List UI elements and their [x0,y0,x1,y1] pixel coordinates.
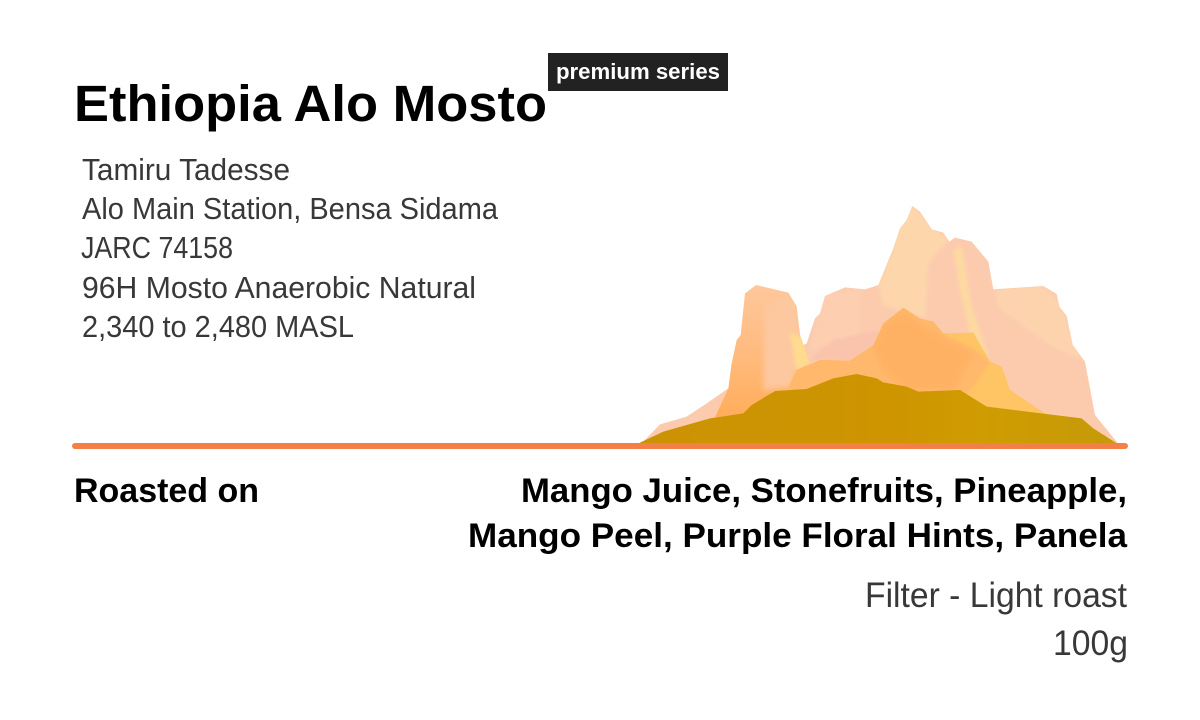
title: Ethiopia Alo Mosto [74,75,547,132]
tasting notes: Mango Peel, Purple Floral Hints, Panela [468,517,1128,555]
roast and weight: Filter - Light roast [865,576,1127,615]
mountain: front olive hill [635,374,1119,445]
coffee details text block [81,152,499,344]
coffee details text block: Alo Main Station, Bensa Sidama [82,191,499,226]
roast and weight: 100g [1053,624,1128,663]
coffee details text block: JARC 74158 [81,230,233,265]
tasting notes [468,472,1128,555]
illustration: layered mountains [635,203,1119,445]
coffee details text block: 2,340 to 2,480 MASL [82,309,354,344]
badge: premium series [548,53,728,91]
roast and weight [865,576,1128,663]
mountain: left tower [715,285,812,417]
coffee details text block: Tamiru Tadesse [82,152,290,187]
coffee details text block: 96H Mosto Anaerobic Natural [82,270,476,305]
mountain: back pink range [640,203,1119,445]
divider line [72,443,1128,449]
badge: premium series: premium series [556,59,720,84]
roasted on label: Roasted on [74,472,259,510]
tasting notes: Mango Juice, Stonefruits, Pineapple, [521,472,1127,510]
mountain: middle orange ridge [786,308,1046,414]
